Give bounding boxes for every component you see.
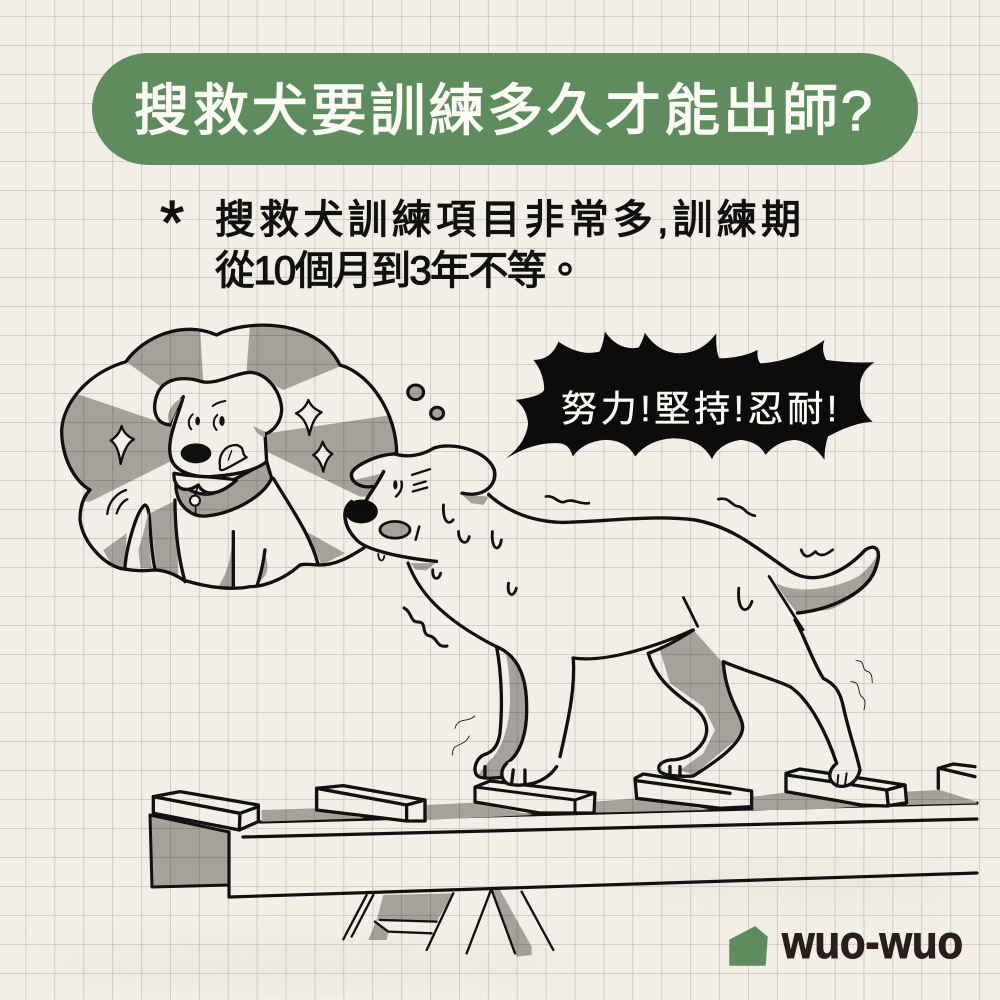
thought dog tongue (220, 445, 247, 470)
tremble marks by chest (404, 608, 447, 646)
thought dog collar (174, 462, 272, 516)
hind leg near (723, 620, 860, 786)
sparkle lower right (313, 442, 332, 472)
dog back and tail (409, 493, 878, 630)
thought dog tail (107, 490, 155, 569)
speech burst text: 努力!堅持!忍耐! (561, 388, 837, 429)
intro text block: 搜救犬訓練項目非常多,訓練期 (215, 198, 801, 242)
tired dog on beam (345, 385, 878, 786)
plank 5 (786, 769, 907, 806)
speech burst (505, 332, 874, 460)
tremble marks by hind leg (851, 661, 872, 710)
front leg near (560, 658, 574, 757)
intro text block: 從10個月到3年不等。 (215, 249, 585, 293)
front leg far (475, 647, 560, 785)
plank 3 (475, 781, 595, 813)
sparkle left (111, 426, 134, 464)
plank 6 (938, 764, 975, 793)
sparkle top right (296, 400, 322, 435)
sweat drops and tremble marks (408, 385, 833, 610)
thought dog body (175, 477, 318, 588)
dog eye and brows (393, 469, 430, 540)
dog head (345, 446, 495, 570)
thought dog head (155, 372, 282, 477)
title text: 搜救犬要訓練多久才能出師? (134, 79, 872, 142)
balance beam (150, 764, 977, 957)
plank 4 (635, 774, 752, 808)
tremble marks by front paw (453, 716, 475, 755)
dog cheek (380, 521, 410, 538)
logo (730, 916, 963, 968)
dog chest and belly (408, 563, 693, 659)
thought bubble with proud rescue dog (57, 323, 403, 588)
beam side and top (150, 803, 977, 897)
plank 2 (317, 786, 425, 821)
shadows between planks (262, 790, 977, 822)
hind leg far (648, 630, 743, 776)
plank 1 (153, 792, 258, 830)
trestle legs (343, 888, 553, 957)
logo house icon (730, 927, 767, 965)
front paw near (502, 753, 560, 785)
asterisk bullet: * (160, 189, 184, 258)
dog nose (345, 499, 378, 523)
logo wordmark: wuo-wuo (781, 916, 963, 968)
title banner (92, 53, 918, 165)
plank 3 edge (475, 787, 595, 812)
intro text block (160, 189, 801, 293)
